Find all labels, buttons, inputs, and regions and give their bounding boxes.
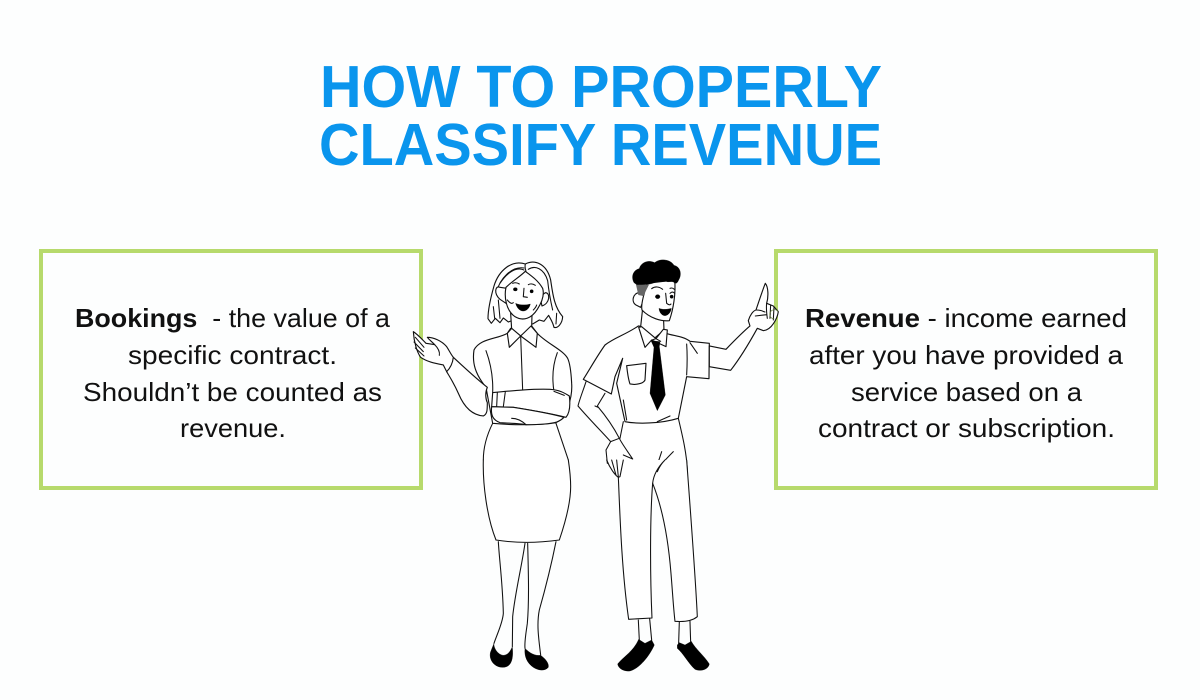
illustration: woman xyxy=(413,262,572,670)
title xyxy=(319,54,882,178)
bookings definition text xyxy=(75,303,391,443)
title: HOW TO PROPERLY xyxy=(320,54,882,120)
revenue definition text: Revenue - income earned xyxy=(805,303,1127,333)
bookings definition text: specific contract. xyxy=(128,340,337,370)
panel: bookings xyxy=(41,251,421,488)
panel: revenue xyxy=(776,251,1156,488)
bookings definition text: Shouldn’t be counted as xyxy=(83,377,382,407)
revenue definition text xyxy=(805,303,1127,443)
revenue definition text: after you have provided a xyxy=(809,340,1124,370)
title: CLASSIFY REVENUE xyxy=(319,112,882,178)
revenue definition text: contract or subscription. xyxy=(818,413,1115,443)
bookings definition text: Bookings - the value of a xyxy=(75,303,391,333)
illustration: man xyxy=(578,260,778,671)
bookings definition text: revenue. xyxy=(180,413,286,443)
revenue definition text: service based on a xyxy=(851,377,1083,407)
